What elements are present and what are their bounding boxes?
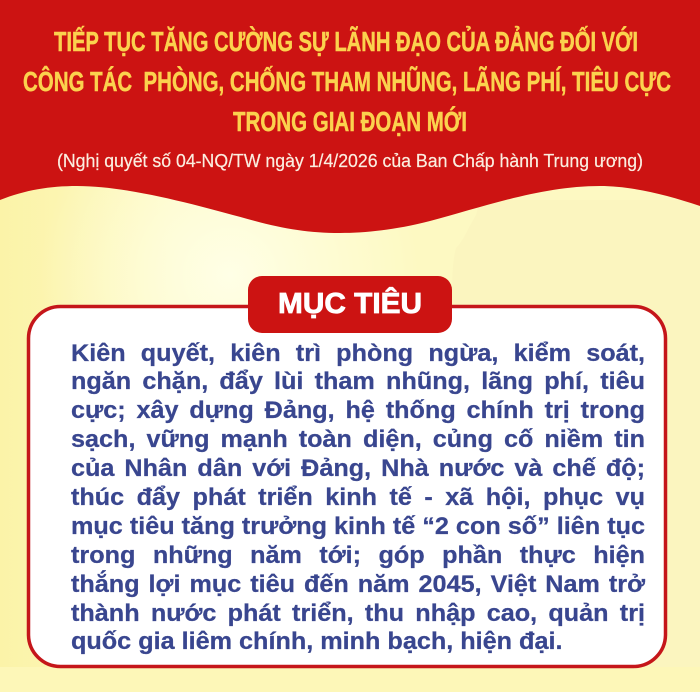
badge: heading bbox=[248, 276, 452, 333]
body text: ngăn chặn, đẩy lùi tham nhũng, lãng phí, tiêu bbox=[71, 368, 645, 395]
body text: Kiên quyết, kiên trì phòng ngừa, kiểm soát, bbox=[71, 340, 645, 366]
body text: thành nước phát triển, thu nhập cao, quản trị bbox=[71, 600, 645, 627]
body text: thắng lợi mục tiêu đến năm 2045, Việt Nam trở bbox=[71, 571, 645, 598]
title: TRONG GIAI ĐOẠN MỚI bbox=[233, 106, 467, 137]
body text: trong những năm tới; góp phần thực hiện bbox=[71, 542, 645, 569]
body text: cực; xây dựng Đảng, hệ thống chính trị trong bbox=[71, 397, 645, 424]
body text: quốc gia liêm chính, minh bạch, hiện đại. bbox=[71, 628, 562, 655]
badge: heading: MỤC TIÊU bbox=[278, 286, 422, 320]
subtitle: (Nghị quyết số 04-NQ/TW ngày 1/4/2026 của Ban Chấp hành Trung ương) bbox=[57, 151, 643, 171]
body text: mục tiêu tăng trưởng kinh tế “2 con số” liên tục bbox=[71, 513, 645, 540]
body text: thúc đẩy phát triển kinh tế - xã hội, phục vụ bbox=[71, 484, 645, 511]
body text bbox=[71, 340, 646, 655]
body text: của Nhân dân với Đảng, Nhà nước và chế độ; bbox=[71, 455, 645, 482]
title bbox=[23, 25, 671, 137]
panel: objective box bbox=[28, 306, 666, 666]
body text: sạch, vững mạnh toàn diện, củng cố niềm tin bbox=[71, 426, 645, 453]
